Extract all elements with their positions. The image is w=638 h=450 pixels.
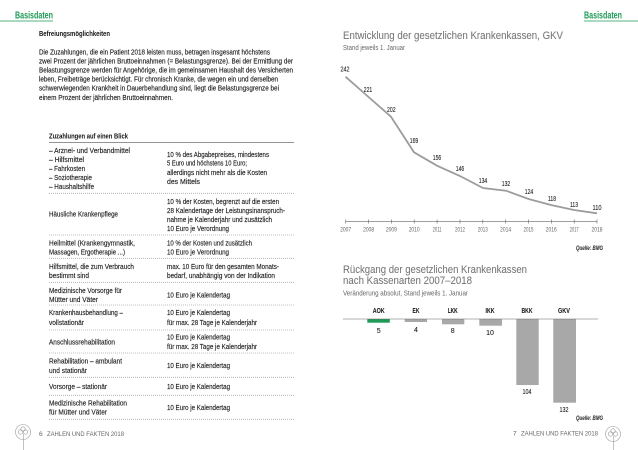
value labels: 132 bbox=[502, 181, 510, 188]
row: Medizinische Rehabilitation bbox=[49, 398, 230, 416]
subtitle: Stand: Stand jeweils 1. Januar bbox=[343, 43, 405, 52]
value labels: 118 bbox=[548, 196, 556, 203]
row: Heilmittel bbox=[49, 238, 252, 256]
x axis: 2012 bbox=[455, 228, 465, 234]
row: Hilfsmittel zum Verbrauch: bestimmt sind bbox=[49, 271, 89, 280]
bar chart: Kassenarten bbox=[343, 308, 598, 414]
x axis: 2016 bbox=[546, 228, 557, 234]
text block: Zuzahlungen: Belastungsgrenze werden für Angehörige, die im gemeinsamen Haushalt des Versicherten bbox=[39, 66, 293, 74]
title: Rückgang: Rückgang der gesetzlichen Krankenkassen bbox=[343, 264, 527, 276]
value labels: 124 bbox=[525, 189, 533, 196]
row: Hilfsmittel zum Verbrauch: Hilfsmittel, die zum Verbrauch bbox=[49, 262, 134, 271]
row: Arznei- und Verbandmittel: allerdings nicht mehr als die Kosten bbox=[167, 168, 267, 177]
row: Arznei- und Verbandmittel: – Soziotherapie bbox=[49, 173, 92, 182]
x axis: 2008 bbox=[363, 228, 375, 234]
x axis: 2011 bbox=[433, 228, 442, 234]
table: Zuzahlungen auf einen Blick bbox=[49, 132, 294, 419]
bar: EK: EK bbox=[412, 308, 420, 315]
bar: AOK bbox=[367, 308, 390, 335]
x axis: 2013 bbox=[478, 228, 488, 234]
bar: LKK: LKK bbox=[448, 308, 458, 315]
value labels bbox=[340, 66, 602, 212]
value labels: 169 bbox=[410, 138, 418, 145]
data line bbox=[346, 77, 597, 213]
value labels: 221 bbox=[364, 87, 372, 94]
row: Häusliche Krankenpflege: nahme je Kalenderjahr und zusätzlich bbox=[167, 215, 272, 224]
row: Arznei- und Verbandmittel: – Arznei- und Verbandmittel bbox=[49, 146, 130, 155]
x axis: 2009 bbox=[386, 228, 397, 234]
title: Rückgang bbox=[343, 264, 527, 287]
subtitle: Veränderung: Veränderung absolut, Stand jeweils 1. Januar bbox=[343, 289, 468, 298]
row: Vorsorge stationär: 10 Euro je Kalendertag bbox=[167, 382, 230, 391]
source: bar chart: Quelle: BMG bbox=[576, 415, 603, 422]
row: Arznei- und Verbandmittel: – Haushaltshilfe bbox=[49, 182, 94, 191]
row: Vorsorge stationär: Vorsorge – stationär bbox=[49, 382, 108, 391]
source: line chart: Quelle: BMG bbox=[576, 245, 603, 252]
header left: Basisdaten: Basisdaten bbox=[15, 10, 53, 22]
footer left: ZAHLEN UND FAKTEN 2018 bbox=[47, 431, 124, 438]
bar: GKV bbox=[553, 308, 576, 414]
bar: EK: 4 bbox=[414, 327, 418, 334]
text block: Zuzahlungen: Die Zuzahlungen, die ein Patient 2018 leisten muss, betragen insgesamt höchstens bbox=[39, 48, 270, 56]
bar: IKK bbox=[479, 308, 502, 337]
footer right: ZAHLEN UND FAKTEN 2018 bbox=[521, 430, 598, 438]
row: Arznei- und Verbandmittel: – Hilfsmittel bbox=[49, 155, 84, 164]
value labels: 113 bbox=[570, 202, 578, 209]
row: Arznei- und Verbandmittel bbox=[49, 146, 269, 191]
row: Häusliche Krankenpflege bbox=[49, 197, 286, 233]
text block: Zuzahlungen bbox=[39, 48, 294, 102]
row: Anschlussrehabilitation bbox=[49, 332, 258, 351]
x axis: 2015 bbox=[524, 228, 534, 234]
row: Anschlussrehabilitation: für max. 28 Tage je Kalenderjahr bbox=[167, 342, 258, 351]
value labels: 110 bbox=[592, 205, 602, 212]
row: Heilmittel: 10 % der Kosten und zusätzlich bbox=[167, 238, 252, 248]
row: Krankenhausbehandlung: vollstationär bbox=[49, 318, 85, 327]
bar: GKV: 132 bbox=[560, 407, 569, 414]
row: Krankenhausbehandlung: Krankenhausbehandlung – bbox=[49, 308, 123, 317]
row: Medizinische Vorsorge: Medizinische Vorsorge für bbox=[49, 286, 123, 295]
heading: Befreiungsmöglichkeiten: Befreiungsmöglichkeiten bbox=[39, 29, 110, 38]
row: Hilfsmittel zum Verbrauch: bedarf, unabhängig von der Indikation bbox=[167, 271, 275, 280]
row: Hilfsmittel zum Verbrauch: max. 10 Euro für den gesamten Monats- bbox=[167, 262, 280, 271]
x axis: 2017 bbox=[570, 228, 579, 234]
bar: AOK: 5 bbox=[377, 328, 381, 335]
row: Arznei- und Verbandmittel: des Mittels bbox=[167, 177, 200, 186]
text block: Zuzahlungen: zwei Prozent der jährlichen Bruttoeinnahmen (= Belastungsgrenze). Bei der Ermittlung der bbox=[39, 56, 294, 66]
row: Häusliche Krankenpflege: 28 Kalendertage der Leistungsinanspruch- bbox=[167, 206, 286, 215]
row: Hilfsmittel zum Verbrauch bbox=[49, 262, 280, 280]
row: Heilmittel: Massagen, Ergotherapie ...) bbox=[49, 248, 125, 256]
value labels: 134 bbox=[479, 178, 487, 185]
row: Rehabilitation bbox=[49, 356, 230, 375]
row: Rehabilitation: Rehabilitation – ambulant bbox=[49, 356, 122, 366]
icon: logo right bbox=[606, 426, 620, 450]
bar: IKK: IKK bbox=[486, 308, 494, 315]
bar: IKK: 10 bbox=[486, 330, 494, 337]
row: Häusliche Krankenpflege: Häusliche Krankenpflege bbox=[49, 210, 118, 218]
row: Häusliche Krankenpflege: 10 Euro je Verordnung bbox=[167, 224, 229, 233]
header right: Basisdaten: Basisdaten bbox=[584, 10, 622, 22]
line chart: Anzahl Krankenkassen bbox=[340, 66, 603, 234]
title: Entwicklung der Krankenkassen: Entwicklung der gesetzlichen Krankenkassen, GKV bbox=[343, 30, 564, 42]
bar: BKK: BKK bbox=[522, 308, 532, 315]
x axis bbox=[340, 220, 603, 234]
row: Medizinische Vorsorge bbox=[49, 286, 230, 304]
bar: LKK bbox=[442, 308, 464, 335]
row: Medizinische Vorsorge: Mütter und Väter bbox=[49, 295, 99, 304]
value labels: 146 bbox=[456, 166, 464, 173]
value labels: 202 bbox=[387, 107, 396, 114]
bar: BKK: 104 bbox=[522, 389, 532, 396]
row: Anschlussrehabilitation: 10 Euro je Kalendertag bbox=[167, 332, 230, 342]
row: Anschlussrehabilitation: Anschlussrehabilitation bbox=[49, 338, 115, 346]
footer right bbox=[513, 426, 620, 450]
row: Häusliche Krankenpflege: 10 % der Kosten, begrenzt auf die ersten bbox=[167, 197, 279, 206]
row: Rehabilitation: 10 Euro je Kalendertag bbox=[167, 361, 230, 370]
row: Medizinische Rehabilitation: Medizinische Rehabilitation bbox=[49, 398, 127, 408]
row: Vorsorge stationär bbox=[49, 382, 230, 391]
row: Heilmittel: Heilmittel (Krankengymnastik, bbox=[49, 238, 135, 248]
text block: Zuzahlungen: leben, Freibeträge berücksichtigt. Für chronisch Kranke, die wegen ein und derselben bbox=[39, 75, 278, 84]
row: Heilmittel: 10 Euro je Verordnung bbox=[167, 248, 229, 256]
row: Medizinische Rehabilitation: für Mütter und Väter bbox=[49, 408, 108, 416]
title: Rückgang: nach Kassenarten 2007–2018 bbox=[343, 275, 472, 287]
bar: GKV: GKV bbox=[558, 308, 570, 315]
row: Rehabilitation: und stationär bbox=[49, 366, 88, 375]
table heading: Zuzahlungen auf einen Blick bbox=[49, 132, 128, 140]
value labels: 242 bbox=[340, 66, 350, 74]
x axis: 2018 bbox=[592, 228, 603, 234]
text block: Zuzahlungen: einem Prozent der jährlichen Bruttoeinnahmen. bbox=[39, 93, 173, 102]
x axis: 2014 bbox=[500, 228, 512, 234]
row: Arznei- und Verbandmittel: 10 % des Abgabepreises, mindestens bbox=[167, 150, 269, 159]
x axis: 2007 bbox=[340, 228, 352, 234]
footer right: 7 bbox=[513, 430, 517, 438]
row: Krankenhausbehandlung bbox=[49, 308, 258, 327]
icon: logo left bbox=[16, 424, 30, 450]
x axis: 2010 bbox=[409, 228, 420, 234]
row: Medizinische Rehabilitation: 10 Euro je Kalendertag bbox=[167, 403, 230, 412]
text block: Zuzahlungen: schwerwiegenden Krankheit in Dauerbehandlung sind, liegt die Belastungsgrenze bei bbox=[39, 84, 279, 93]
row: Medizinische Vorsorge: 10 Euro je Kalendertag bbox=[167, 290, 230, 300]
header left: Basisdaten bbox=[0, 10, 53, 22]
bar: EK bbox=[405, 308, 427, 334]
bar: LKK: 8 bbox=[451, 328, 455, 335]
value labels: 156 bbox=[433, 155, 441, 162]
row: Krankenhausbehandlung: 10 Euro je Kalendertag bbox=[167, 308, 230, 317]
bar: BKK bbox=[516, 308, 539, 396]
row: Krankenhausbehandlung: für max. 28 Tage je Kalenderjahr bbox=[167, 318, 258, 327]
bar: AOK: AOK bbox=[373, 308, 385, 315]
row: Arznei- und Verbandmittel: 5 Euro und höchstens 10 Euro; bbox=[167, 158, 247, 168]
footer left bbox=[16, 424, 124, 450]
row: Arznei- und Verbandmittel: – Fahrkosten bbox=[49, 164, 85, 173]
footer left: 6 bbox=[39, 431, 43, 438]
